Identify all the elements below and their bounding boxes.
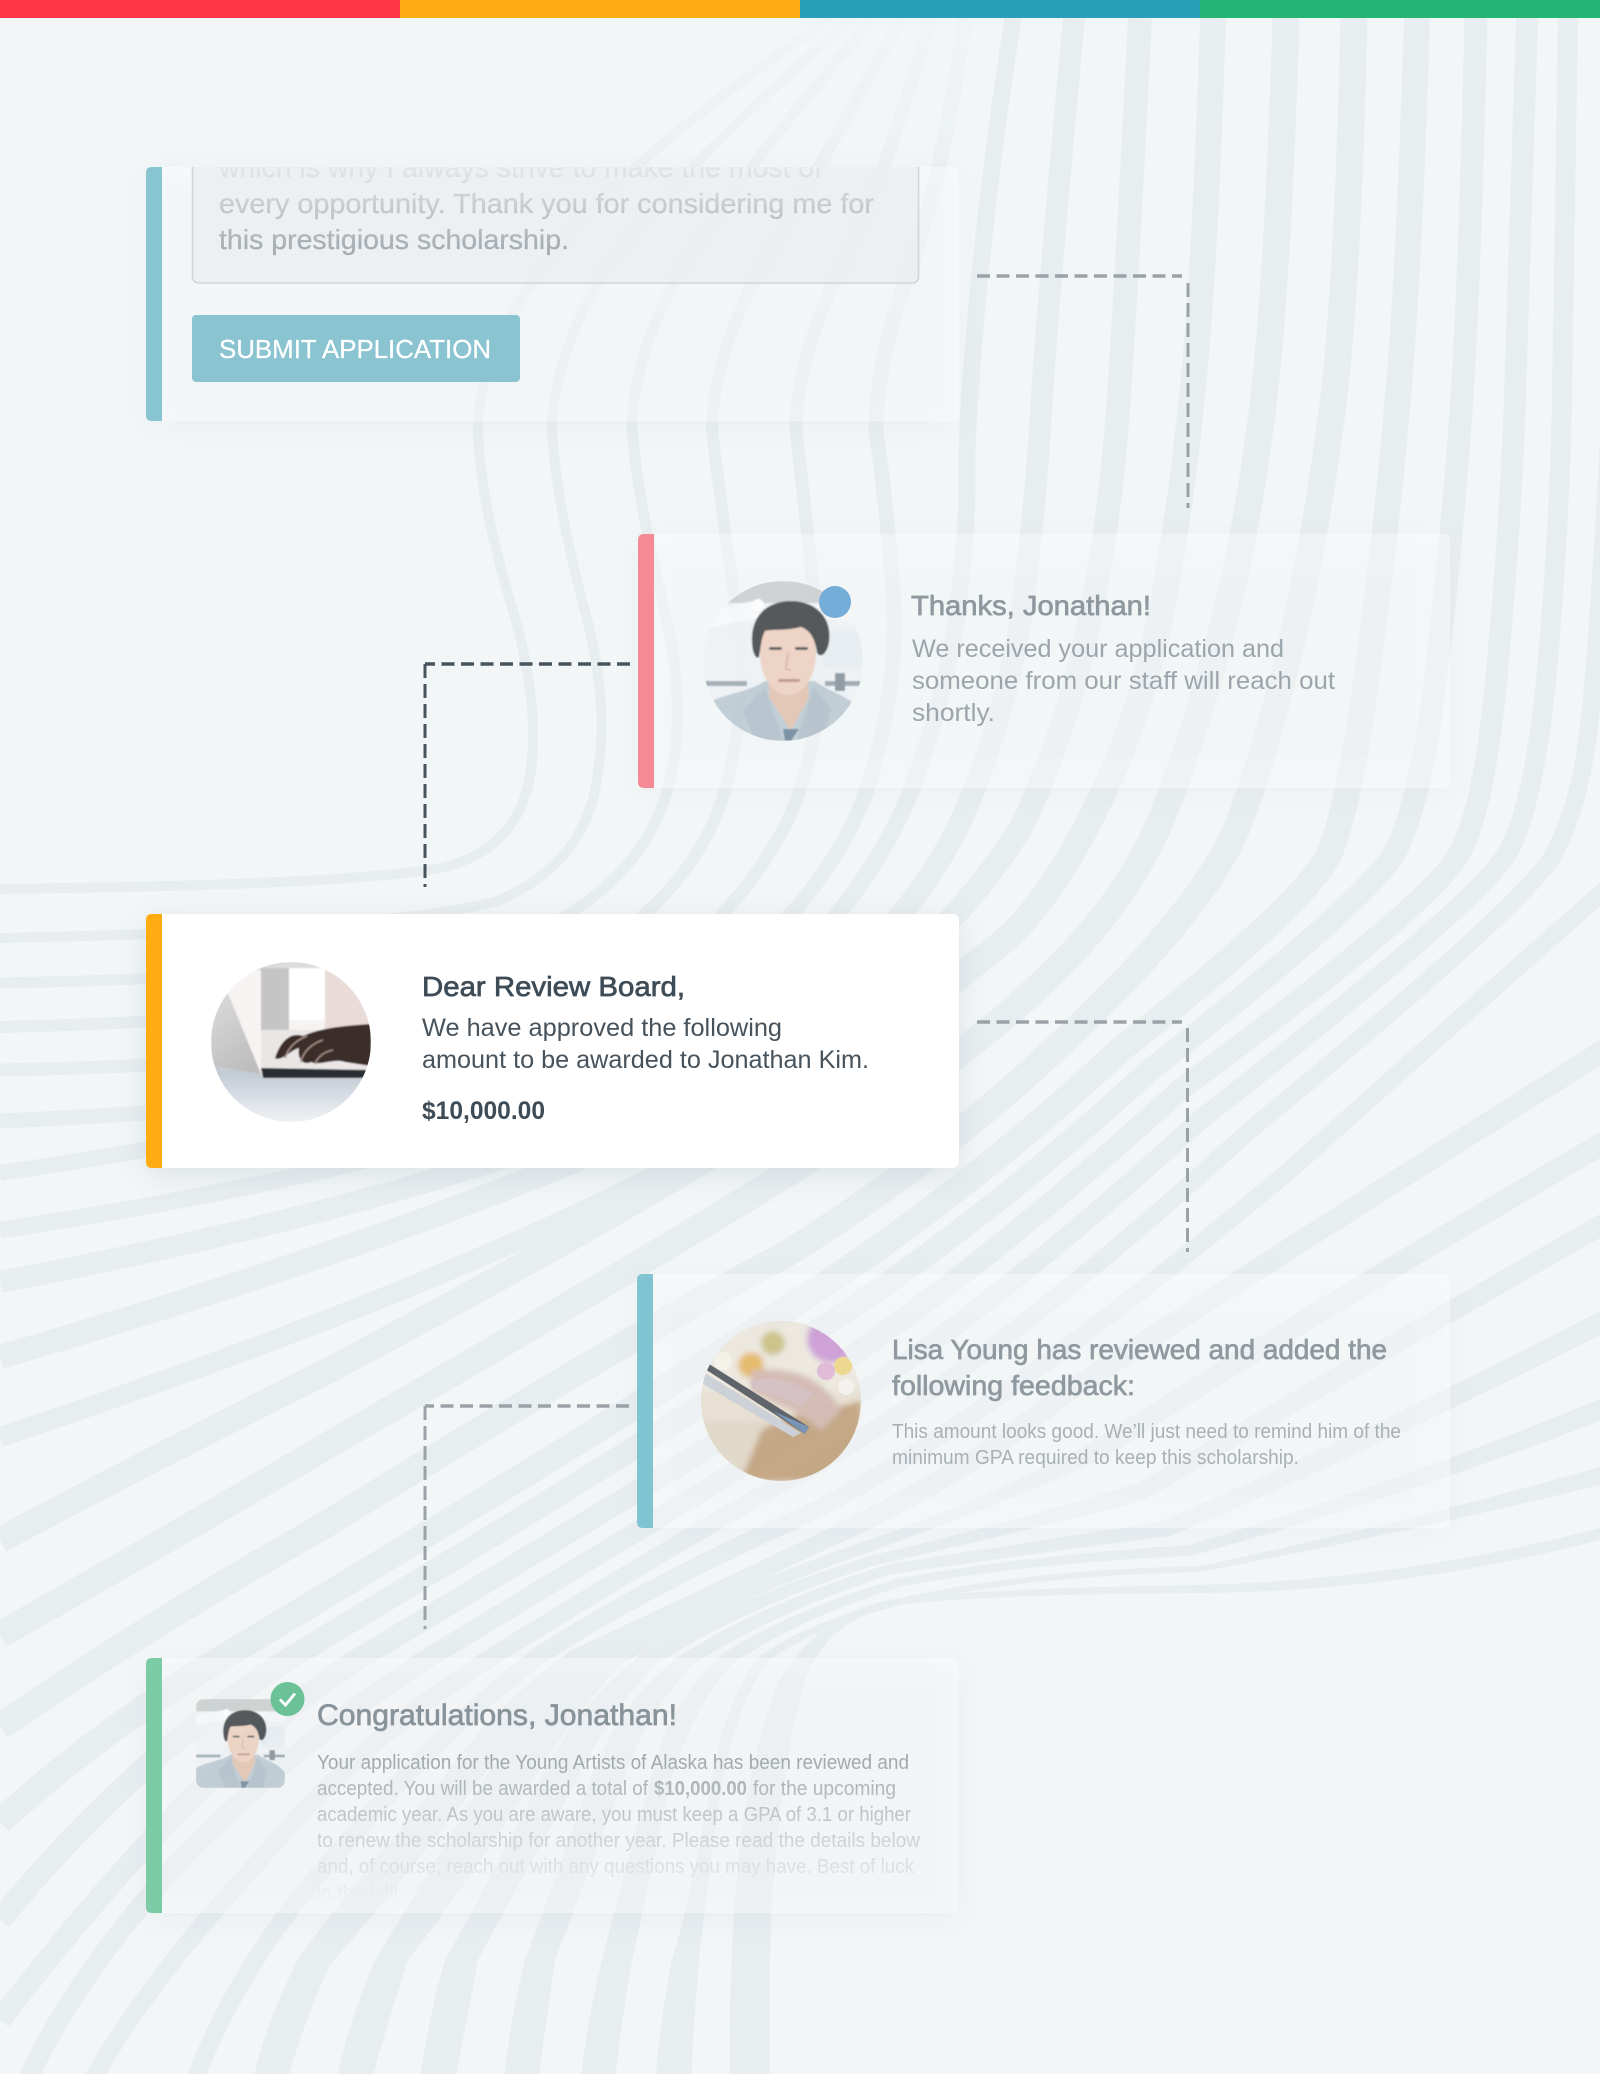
top colour bar	[0, 0, 1600, 18]
fading letter text: Your application for the Young Artists of Alaska has been reviewed and	[317, 1752, 909, 1774]
panel: reviewer feedback	[637, 1274, 1450, 1533]
body text: amount to be awarded to Jonathan Kim.	[422, 1046, 869, 1074]
body text: shortly.	[912, 699, 995, 727]
fading letter text: accepted. You will be awarded a total of	[317, 1778, 648, 1800]
feedback text: minimum GPA required to keep this scholarship.	[892, 1447, 1299, 1469]
heading: Dear Review Board,	[422, 971, 685, 1002]
panel: thanks message	[638, 534, 1450, 793]
textarea with fading essay text: this prestigious scholarship.	[219, 224, 569, 255]
icon: check badge	[270, 1682, 304, 1716]
connector: thanks to review board	[425, 664, 630, 887]
textarea with fading essay text: which is why I always strive to make the most of	[218, 152, 822, 183]
textarea with fading essay text	[192, 167, 920, 284]
body text	[912, 635, 1335, 727]
heading: following feedback:	[892, 1370, 1135, 1401]
photo: Jonathan thumbnail	[196, 1699, 285, 1788]
submit button: SUBMIT APPLICATION	[219, 336, 491, 364]
fading letter text: in the fall!	[317, 1882, 399, 1904]
awarded amount: $10,000.00	[422, 1097, 545, 1125]
fading letter text: to renew the scholarship for another year. Please read the details below	[317, 1830, 921, 1852]
connector: application to thanks	[977, 276, 1188, 508]
connector: feedback to congratulations	[425, 1406, 629, 1629]
heading	[892, 1334, 1387, 1401]
heading: Thanks, Jonathan!	[911, 590, 1151, 621]
photo: hands typing on laptop	[211, 962, 371, 1122]
body text: We received your application and	[912, 635, 1284, 663]
submit button	[192, 315, 520, 382]
heading: Lisa Young has reviewed and added the	[892, 1334, 1387, 1365]
photo: Jonathan portrait	[703, 581, 863, 741]
fading letter text: $10,000.00	[654, 1778, 747, 1800]
panel: congratulations letter	[146, 1658, 959, 1919]
body text: We have approved the following	[422, 1014, 782, 1042]
fading letter text: and, of course, reach out with any questions you may have. Best of luck	[317, 1856, 915, 1878]
feedback text: This amount looks good. We’ll just need to remind him of the	[892, 1421, 1401, 1443]
textarea with fading essay text: every opportunity. Thank you for considering me for	[219, 188, 874, 219]
panel: review board approval	[146, 914, 959, 1175]
connector: review board to feedback	[977, 1022, 1188, 1252]
fading letter text	[317, 1752, 921, 1904]
feedback text	[892, 1421, 1401, 1469]
body text	[422, 1014, 869, 1074]
body text: someone from our staff will reach out	[912, 667, 1335, 695]
panel: application form	[146, 167, 920, 421]
fading letter text: academic year. As you are aware, you must keep a GPA of 3.1 or higher	[317, 1804, 911, 1826]
photo: hand holding phone	[701, 1315, 861, 1481]
fading letter text: for the upcoming	[753, 1778, 896, 1800]
heading: Congratulations, Jonathan!	[317, 1699, 677, 1732]
status dot	[819, 586, 851, 618]
